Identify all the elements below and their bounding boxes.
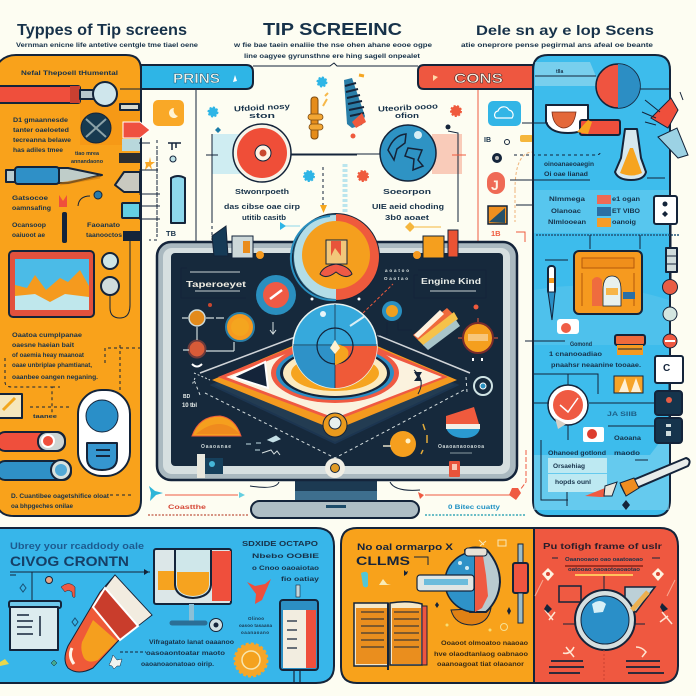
diamond platform	[200, 322, 470, 443]
sparkles	[435, 602, 511, 632]
text lines	[565, 557, 643, 573]
panel: right blue: JA SIIB	[607, 411, 637, 418]
small text	[71, 151, 104, 165]
footnote	[11, 494, 109, 510]
legend	[548, 195, 640, 227]
text block 3: oaae unbriplae phamtianat,	[12, 363, 92, 369]
sub labels: Ohanoed gotlond	[548, 451, 606, 457]
header: delete screens: atie oneprore pense pegirmal ans afeal oe beante	[461, 42, 653, 49]
crossed icon	[81, 113, 111, 143]
banner: prins	[141, 65, 253, 89]
text block 1: D1 gmaannesde	[13, 118, 69, 124]
icon: small tool	[168, 143, 181, 150]
text yellow: Olinoo	[248, 616, 264, 621]
small labels and icons	[182, 373, 484, 478]
label row: Gomond	[570, 342, 592, 348]
pros item: blue globe: Uteorib oooo	[378, 101, 439, 114]
text block 2: Faoanato	[87, 223, 120, 229]
text right: Nbebo OOBIE	[252, 553, 320, 560]
glass monitor	[154, 549, 231, 632]
text block 1	[13, 118, 72, 154]
circle: left nodes	[182, 303, 276, 366]
cons column icons: J	[491, 177, 499, 193]
pros item: red button: Stwonrpoeth	[235, 187, 289, 196]
small icons	[361, 540, 506, 588]
wrench icon	[59, 191, 102, 243]
text block 2: oamnsafing	[12, 206, 51, 212]
bottom lists	[549, 661, 664, 673]
globe half icon	[535, 64, 670, 108]
text yellow: oasoo tasaana	[239, 623, 272, 628]
label: taperoeyet: Taperoeyet	[186, 279, 246, 289]
panel: left orange	[0, 55, 150, 516]
dotted separator	[536, 234, 680, 236]
icon: orange square	[153, 100, 184, 126]
text yellow: oaanaoano	[241, 630, 269, 635]
label: engine kind: Oaotao	[384, 276, 408, 281]
text block 2: Ocansoop	[12, 223, 46, 229]
note icon	[9, 601, 61, 650]
icon: c tag	[655, 356, 683, 383]
text block 2: taanooctos	[86, 233, 123, 239]
legend: oanoig	[612, 219, 636, 226]
pros item: blue globe: ofion	[395, 111, 420, 120]
citrus tray icon	[546, 105, 620, 135]
sub labels	[548, 436, 642, 457]
sun gear icon	[235, 644, 267, 676]
footer arrow: right	[418, 450, 526, 515]
orange dome	[192, 416, 241, 436]
open book	[354, 602, 427, 670]
footnote: D. Cuantibee oagetshifice oloat	[11, 494, 109, 500]
panel: bottom blue	[0, 528, 334, 683]
small red tile	[557, 319, 579, 334]
small labels and icons: Oaaoanae	[201, 444, 231, 450]
globe lens icon	[417, 548, 500, 625]
right nodes	[363, 284, 498, 395]
label: engine kind	[384, 268, 486, 298]
bezel	[157, 242, 517, 480]
small labels and icons: 10 tbl	[182, 403, 197, 409]
panel: bottom blue: CIVOG CRONTN	[10, 554, 129, 569]
pale tabs	[548, 458, 607, 492]
tank icon	[280, 585, 318, 682]
ornaments	[545, 610, 672, 657]
header: types of tip screens: Vernman enicne life antetive centgle tme tiael oene	[16, 42, 198, 49]
icon: gradient tile	[488, 206, 507, 224]
text block 2: Gatsocoe	[12, 196, 49, 202]
panel: bottom red	[534, 528, 678, 683]
screen	[171, 253, 503, 466]
crayons	[413, 308, 453, 341]
bottom bezel chips	[197, 454, 205, 478]
text block 2: oaiuoot ae	[12, 233, 46, 239]
banner: cons	[418, 65, 533, 89]
text block 2	[12, 196, 123, 239]
text block: Ooaoot olmoatoo naaoao	[441, 640, 528, 647]
text block 3: oaesne haeian bait	[12, 343, 74, 349]
large pen icon	[585, 458, 690, 510]
probes	[101, 235, 130, 318]
text right: fio oatiay	[281, 577, 320, 583]
text center: oaoanoaonatoao oirip.	[141, 661, 214, 668]
heading: No oal ormarpo X	[357, 542, 454, 553]
globe half icon: tlla	[556, 69, 563, 75]
panel: bottom orange	[341, 528, 534, 683]
panel heading: Nefal Thepoell tHumental	[21, 70, 118, 77]
red bow	[247, 579, 271, 604]
pros item: red button: utitib casitb	[242, 213, 286, 222]
heading: Ubrey your rcaddody oale	[10, 541, 144, 552]
blue pen	[6, 167, 102, 184]
text block 1: has adiles tmee	[13, 148, 64, 154]
icon: cloud	[488, 101, 521, 126]
cons column icons: 1B	[491, 229, 501, 238]
banner: cons: CONS	[454, 70, 503, 86]
pros item: blue globe	[348, 101, 466, 232]
icon: stacked chip	[666, 248, 677, 272]
central sphere	[293, 304, 377, 388]
label: engine kind: aoatoo	[385, 268, 409, 273]
text right: o Cnoo oaoaiotao	[252, 566, 319, 572]
legend: Nlmmega	[549, 196, 585, 203]
legend: ET VIBO	[612, 208, 640, 215]
top badge	[291, 214, 379, 300]
pen icon	[548, 266, 555, 320]
footer arrow: right: 0 Bitec cuatty	[448, 504, 500, 511]
sub labels: maodo	[614, 451, 640, 457]
small text: annandaono	[71, 159, 104, 165]
text right	[242, 539, 320, 583]
icon: flower	[358, 106, 461, 181]
text block: hve olaodtanlaog oabnaoo	[434, 651, 528, 658]
red dial	[256, 275, 296, 315]
base	[251, 501, 419, 518]
red tool	[0, 82, 141, 110]
pros item: blue globe: UIE aeid choding	[372, 202, 444, 211]
icon: blue tab	[171, 176, 185, 223]
text block 1: tanter oaeloeted	[13, 128, 69, 134]
text block: Oi oae lianad	[544, 172, 588, 178]
stand	[295, 480, 377, 501]
right rail icons: C	[663, 363, 670, 374]
label: taperoeyet	[181, 268, 246, 298]
flask icon	[615, 129, 646, 180]
icon: gear	[208, 78, 326, 181]
centre connector lines	[149, 63, 478, 243]
monitor	[157, 214, 517, 518]
icon: knot tool	[308, 93, 328, 139]
footnote: oa bhpgeches onilae	[11, 504, 74, 510]
header: types of tip screens	[16, 22, 198, 49]
ornaments	[0, 576, 122, 669]
pale tabs: Orsaehiag	[553, 464, 585, 470]
text lines	[549, 352, 641, 369]
title	[233, 19, 432, 60]
header: delete screens: Dele sn ay e lop Scens	[476, 23, 654, 38]
pros item: red button: Ufdoid nosy	[234, 101, 291, 113]
blue slider	[0, 460, 71, 480]
heading: Pu tofigh frame of uslr	[543, 541, 663, 551]
text block 3: of oaemia heay maanoat	[12, 353, 84, 359]
right rail icons	[654, 196, 683, 443]
panel: left orange: taanee	[33, 414, 57, 420]
legend: e1 ogan	[612, 196, 640, 203]
text block: oinoanaeoaegin	[544, 162, 594, 168]
text block 3: Oaatoa cumplpanae	[12, 333, 83, 339]
title: TIP SCREEINC	[263, 19, 402, 39]
clip icons top	[212, 226, 458, 259]
title: w fie bae taein enaliie the nse ohen ahane eooe ogpe	[233, 42, 432, 49]
text block	[434, 640, 528, 668]
text lines: Oaanooaoo oao oaatoaoao	[565, 557, 643, 563]
shop icon	[574, 251, 642, 314]
text lines: 1 cnanooadiao	[549, 352, 602, 358]
text lines: pnaahsr neaanine tooaae.	[551, 363, 641, 369]
diamonds	[535, 568, 675, 596]
panel: right blue	[513, 55, 690, 516]
small labels and icons: BD	[183, 394, 191, 400]
label: engine kind: Engine Kind	[421, 277, 481, 286]
text center: oasoaontoatar maoto	[146, 650, 225, 657]
footer arrow: left: Coastthe	[168, 504, 207, 511]
plug icon	[513, 544, 528, 623]
red slider	[0, 432, 65, 451]
legend: Nlmlooean	[548, 219, 586, 226]
pros item: red button: ston	[249, 111, 276, 120]
text right: SDXIDE OCTAPO	[242, 539, 318, 548]
small labels and icons: Oaaoanaooaooa	[438, 444, 484, 450]
pros item: red button: das cibse oae cirp	[224, 202, 300, 211]
text center: Vifragatato lanat oaaanoo	[149, 639, 234, 646]
banner: prins: PRINS	[173, 70, 220, 86]
pale tabs: hopds ounl	[555, 480, 591, 486]
small glyphs: IB	[484, 137, 491, 144]
footer arrow: left	[148, 486, 249, 515]
chart monitor	[9, 251, 94, 317]
flame tile	[614, 376, 643, 393]
text block 1: tecreanna belawe	[13, 138, 72, 144]
legend: Olanoac	[551, 208, 581, 215]
text yellow	[239, 616, 272, 635]
header: types of tip screens: Typpes of Tip screens	[17, 22, 187, 39]
text block 3	[12, 333, 98, 381]
panel: bottom orange: CLLMS	[356, 554, 410, 568]
title: line oagyee gyrunsthne ere hing sagell onpealet	[244, 53, 421, 60]
connector tabs	[115, 172, 140, 192]
text center	[141, 639, 234, 668]
check clock icon	[548, 385, 588, 429]
icon: node tag	[654, 196, 677, 224]
text lines: oatooao oaoaotoaoaotao	[568, 567, 640, 573]
orange orb	[390, 431, 416, 457]
label: tb: TB	[166, 229, 177, 238]
pros item: blue globe: 3b0 aoaet	[385, 213, 430, 222]
red tag	[123, 122, 150, 138]
text block 3: oaanbee oangen neganing.	[12, 375, 98, 381]
icon: coil	[344, 78, 365, 128]
pros item: red button	[206, 78, 350, 230]
test tube icon	[65, 575, 152, 672]
middle strip	[344, 75, 366, 222]
small text: tiao mrea	[75, 151, 100, 157]
text block	[544, 162, 594, 178]
icon: j badge	[487, 172, 505, 194]
sub labels: Oaoana	[614, 436, 642, 442]
prins column icons	[139, 100, 185, 238]
orange bin icon	[615, 335, 645, 355]
cons column icons	[484, 101, 533, 242]
red tool icon	[642, 92, 688, 158]
red chip	[583, 427, 604, 442]
magnifier icon	[559, 576, 655, 650]
bowl icon	[446, 407, 479, 424]
letter icon	[0, 394, 22, 418]
header: delete screens	[461, 23, 654, 49]
handheld device	[78, 390, 130, 476]
pros item: blue globe: Soeorpon	[383, 187, 432, 196]
text block: oaanoagoat tiat olaoanor	[437, 661, 525, 668]
